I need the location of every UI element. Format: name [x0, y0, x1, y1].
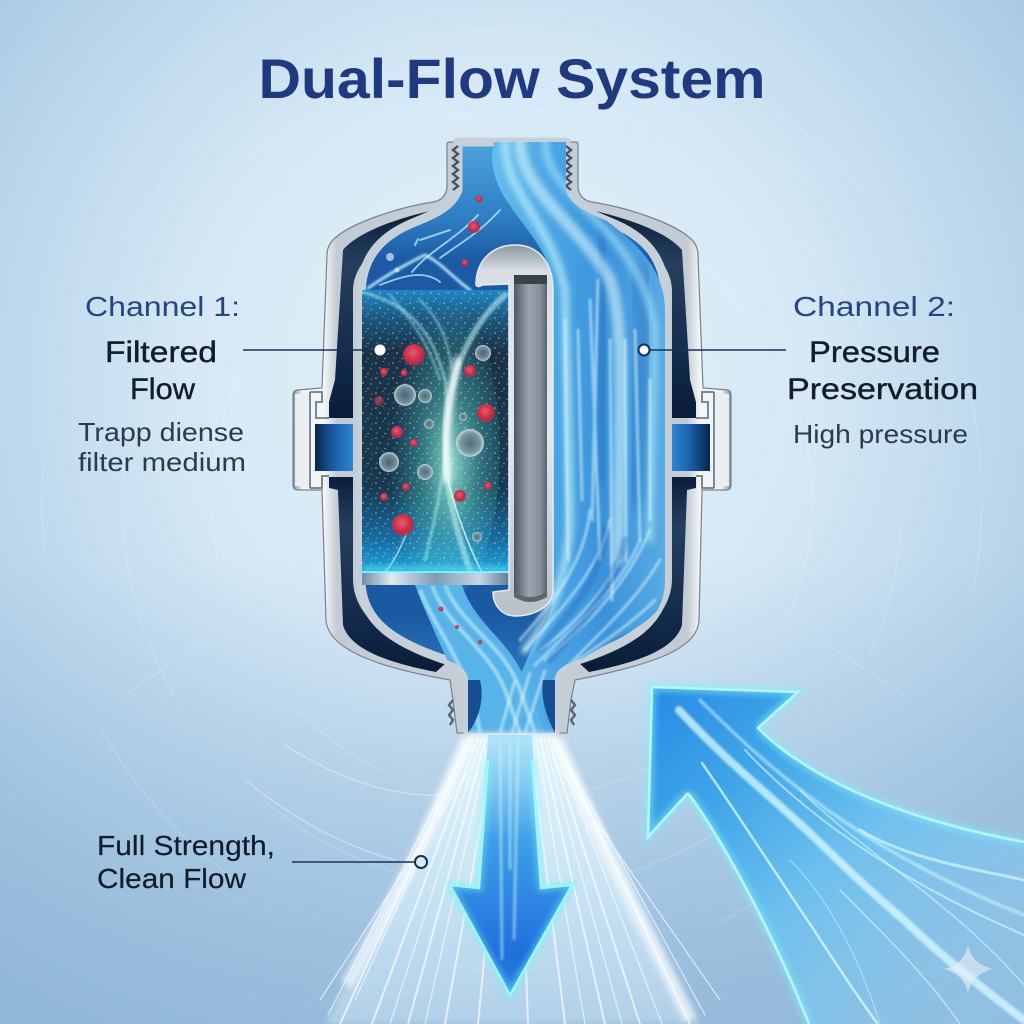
label: channel 1: [78, 291, 246, 477]
callout: channel 2 leader: [638, 344, 786, 356]
dark exit side panels: [468, 680, 555, 733]
label: full strength: Clean Flow: [97, 863, 247, 894]
callout: channel 1 leader: [243, 344, 386, 356]
label: channel 2: High pressure: [793, 419, 968, 449]
label: channel 1: Filtered: [105, 336, 217, 369]
channel 2 water stream: [492, 142, 665, 733]
center bypass tube: [476, 245, 553, 616]
label: channel 1: Channel 1:: [85, 291, 240, 322]
filter base disc: [362, 572, 509, 585]
label: channel 2: Channel 2:: [793, 291, 955, 322]
label: channel 1: Flow: [130, 373, 195, 406]
arrow: incoming high-pressure flow: [648, 687, 1024, 1024]
filter cartridge: [362, 290, 509, 600]
spray of water: [320, 733, 720, 1024]
callout: full strength leader: [292, 856, 427, 868]
contaminant red particles: [374, 344, 495, 536]
label: channel 2: Preservation: [787, 373, 978, 406]
right dark band: [589, 210, 696, 418]
splash above filter: [361, 209, 501, 293]
filter housing: [293, 142, 731, 733]
label: channel 1: filter medium: [78, 447, 246, 477]
arrow: downward flow: [450, 735, 572, 995]
contaminant bubbles: [379, 345, 491, 542]
water flows inside housing: [362, 142, 665, 733]
icon: sparkle: [944, 945, 993, 993]
threads: [453, 146, 571, 190]
bottom left stream: [415, 585, 545, 733]
flange detail right: [672, 392, 729, 488]
flange detail left: [295, 392, 353, 488]
top and bottom red particles: [438, 196, 482, 644]
outer silver shell: [293, 142, 731, 733]
title: Dual-Flow System: [258, 47, 766, 110]
left dark band: [329, 210, 436, 418]
label: full strength: Full Strength,: [97, 830, 275, 861]
label: channel 2: Pressure: [809, 336, 940, 369]
label: channel 1: Trapp diense: [78, 417, 244, 447]
inner wall and water cavity: [361, 142, 665, 733]
label: channel 2: [787, 291, 978, 449]
label: full strength: [97, 830, 275, 894]
central bright stream: [362, 292, 505, 572]
